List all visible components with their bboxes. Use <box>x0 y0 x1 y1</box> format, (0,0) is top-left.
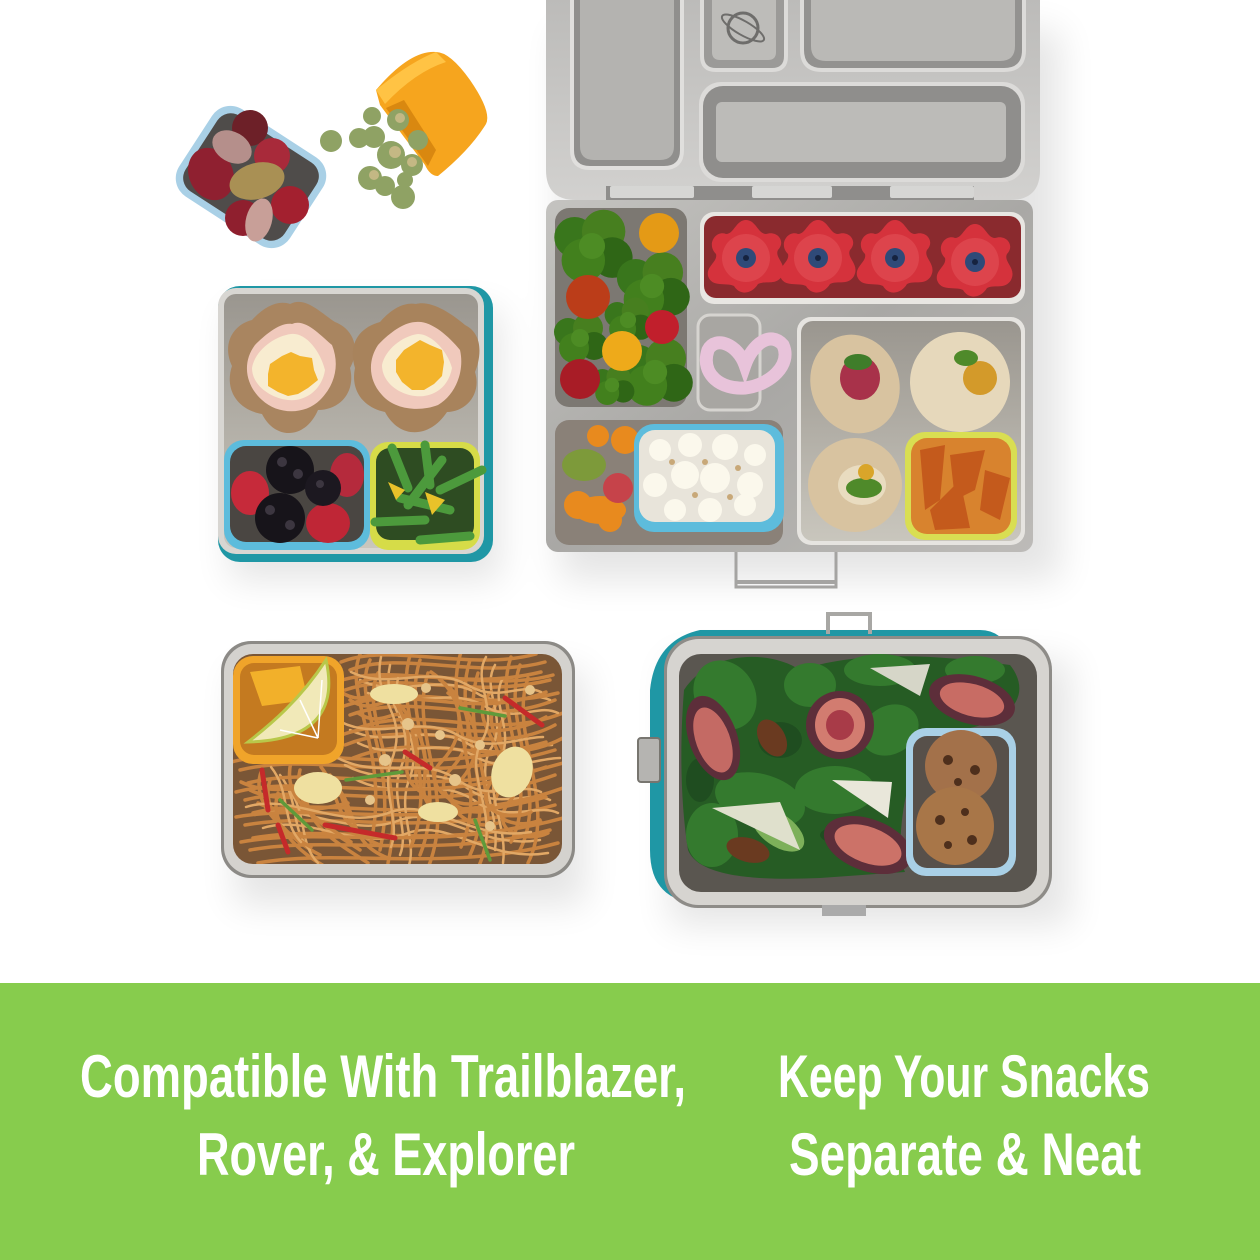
text: compatible heading <box>80 1043 686 1188</box>
panel: square box with sandwiches <box>218 286 493 562</box>
cup: cookies <box>906 728 1016 876</box>
cup: berries <box>224 440 370 550</box>
icon: metal clasp <box>736 552 836 587</box>
panel: noodle box <box>221 641 575 878</box>
panel: base of Rover lunchbox <box>546 200 1033 552</box>
panel: large box with salad <box>638 614 1052 916</box>
text: snacks heading <box>778 1043 1150 1188</box>
sandwich right <box>353 303 479 432</box>
compartment: watermelon flowers <box>700 212 1025 304</box>
compartment: pretzel <box>698 315 785 410</box>
sandwich left <box>228 302 355 433</box>
cup: green beans <box>370 442 482 550</box>
cup: lime and mango <box>233 656 344 764</box>
pecans <box>724 714 793 867</box>
icon: planet logo <box>719 10 767 46</box>
compartment: crackers and popcorn <box>555 420 784 545</box>
compartment: wraps and chips <box>797 317 1025 545</box>
salad greens <box>681 649 1019 879</box>
figs <box>675 665 1021 885</box>
panel: lid of Rover lunchbox <box>546 0 1040 204</box>
icon: orange cup with peas <box>320 52 487 209</box>
text: snacks heading: Separate & Neat <box>789 1121 1141 1188</box>
icon: grape cup <box>167 97 335 257</box>
noodles <box>231 652 563 868</box>
panel: photo of lunchboxes <box>167 0 1070 925</box>
text: compatible heading: Compatible With Trailblazer, <box>80 1043 686 1110</box>
compartment: broccoli and tomatoes <box>554 208 693 407</box>
text: compatible heading: Rover, & Explorer <box>197 1121 575 1188</box>
banner <box>0 983 1260 1260</box>
